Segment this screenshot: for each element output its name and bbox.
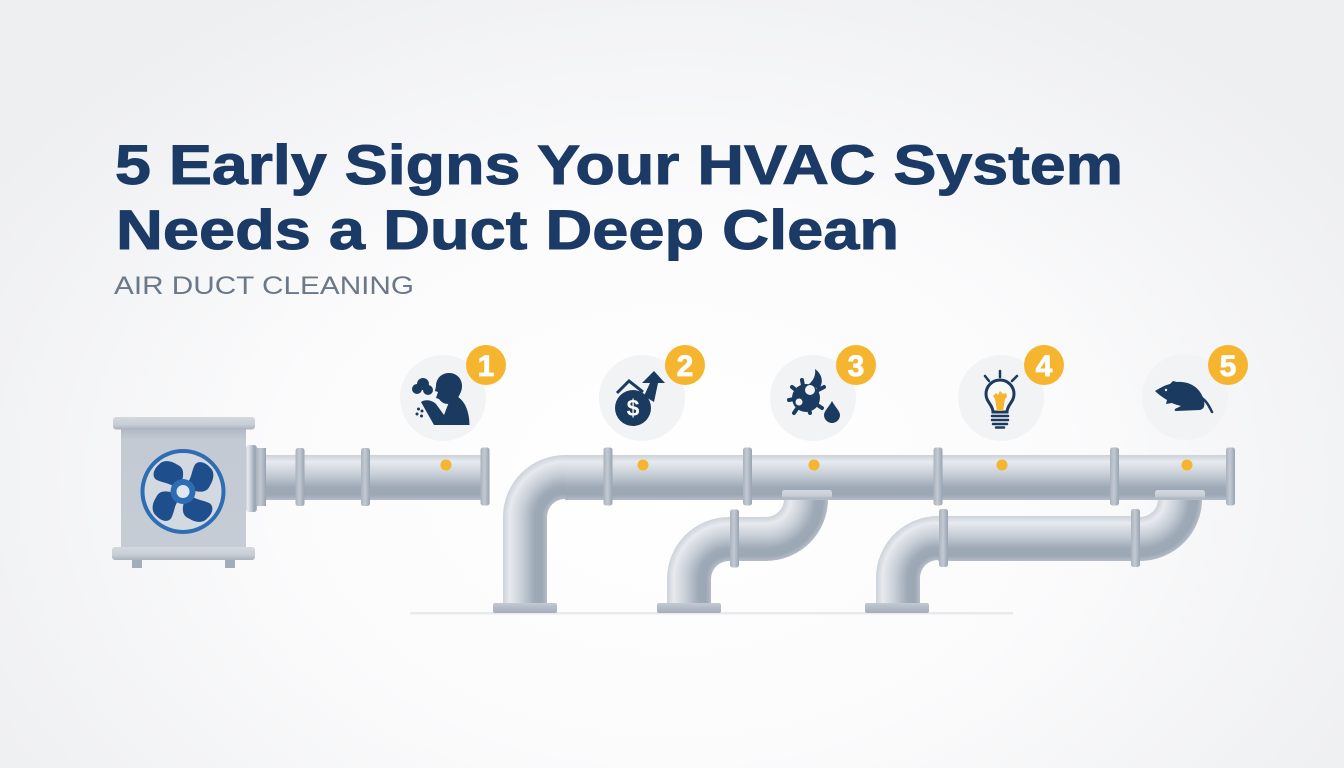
sign 2: rising costs — [599, 355, 685, 441]
subtitle: AIR DUCT CLEANING — [114, 272, 414, 300]
badge 4 — [1024, 345, 1064, 385]
icon: fan — [142, 451, 224, 532]
badge 2 — [665, 345, 705, 385]
sign 5: rodent — [1142, 354, 1228, 440]
badge 4: 4 — [1036, 350, 1053, 383]
sign 1: coughing person — [400, 355, 486, 441]
badge 2: 2 — [677, 350, 693, 383]
ground line — [410, 612, 1013, 614]
title — [115, 133, 1123, 261]
sign 4: light bulb — [958, 355, 1044, 441]
badge 5 — [1208, 345, 1248, 385]
badge 1: 1 — [478, 350, 494, 383]
badge 3: 3 — [848, 350, 864, 383]
icon: person coughing — [412, 373, 470, 425]
badge 1 — [466, 345, 506, 385]
HVAC air handler unit with fan — [112, 417, 255, 568]
icon: germ and water drop — [789, 369, 840, 423]
icon: rat — [1155, 381, 1212, 412]
title: 5 Early Signs Your HVAC System — [115, 133, 1123, 196]
sign 3: mold and moisture — [770, 355, 856, 441]
marker dots on duct — [440, 460, 1192, 470]
lower branch: right-hand return duct — [865, 499, 1202, 613]
lower branch: middle duct — [657, 499, 828, 613]
badge 3 — [836, 345, 876, 385]
icon: light bulb — [985, 371, 1017, 428]
icon: dollar coin with rising arrow: $ — [627, 395, 640, 421]
duct section: from unit to first break — [246, 445, 490, 512]
title: Needs a Duct Deep Clean — [116, 198, 899, 261]
main duct run with elbow — [493, 448, 1235, 613]
badge 5: 5 — [1220, 350, 1236, 383]
